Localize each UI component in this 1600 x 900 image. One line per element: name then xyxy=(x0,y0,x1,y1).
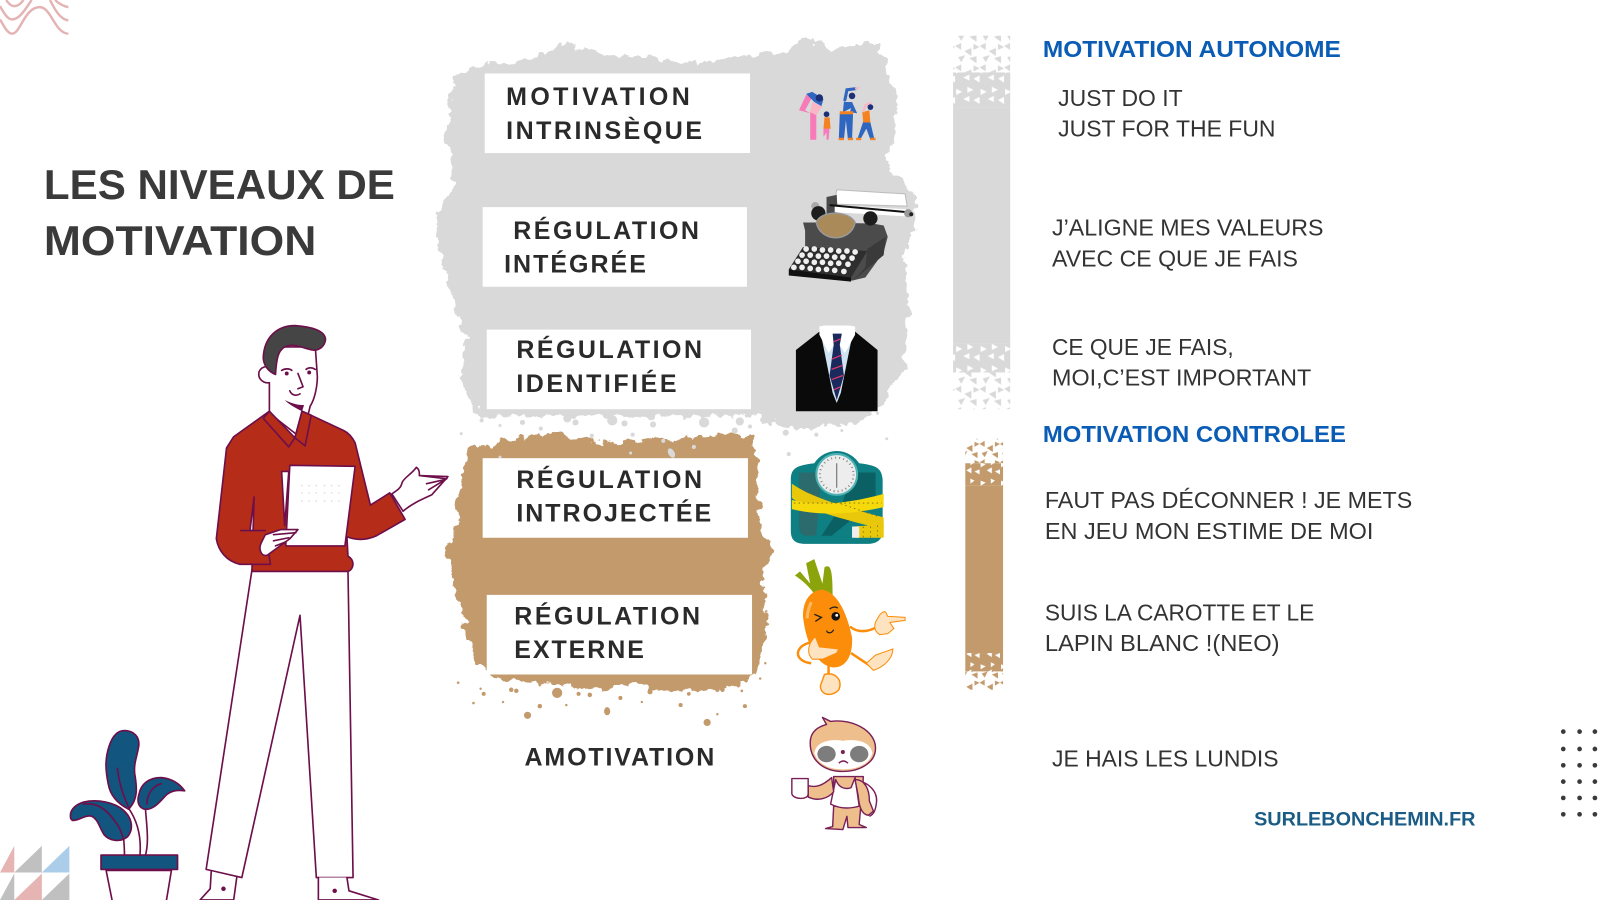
decoration: pink waves top-left xyxy=(0,0,68,34)
label: régulation introjectée: RÉGULATION xyxy=(516,465,702,494)
illustration: man presenting xyxy=(200,326,448,900)
text: just do it: JUST FOR THE FUN xyxy=(1058,116,1276,142)
boy xyxy=(857,121,874,140)
label: régulation externe: RÉGULATION xyxy=(514,601,700,630)
label: régulation intégrée xyxy=(483,207,747,287)
man xyxy=(839,113,853,140)
text: estime de moi: FAUT PAS DÉCONNER ! JE METS xyxy=(1045,487,1412,513)
left hand xyxy=(260,530,298,555)
panel: grey background blob xyxy=(433,39,918,429)
title: MOTIVATION xyxy=(44,217,316,264)
grey vertical strip xyxy=(953,36,1010,409)
sweater xyxy=(216,411,405,571)
label: régulation intégrée: RÉGULATION xyxy=(513,216,699,245)
collar xyxy=(263,411,311,447)
decoration: triangle tiles bottom-left xyxy=(0,846,69,900)
text: important: MOI,C’EST IMPORTANT xyxy=(1052,365,1311,391)
icon: sloth with coffee xyxy=(792,717,877,830)
heading: motivation autonome: MOTIVATION AUTONOME xyxy=(1043,36,1341,62)
sleeve fold xyxy=(250,497,254,531)
text: carotte xyxy=(1045,599,1314,656)
label: régulation identifiée: RÉGULATION xyxy=(516,335,702,364)
title: LES NIVEAUX DE xyxy=(44,161,395,208)
text: carotte: LAPIN BLANC !(NEO) xyxy=(1045,630,1280,656)
text: estime de moi xyxy=(1045,487,1412,544)
text: valeurs: J’ALIGNE MES VALEURS xyxy=(1052,215,1323,241)
right hand xyxy=(392,467,448,511)
tan vertical strip xyxy=(965,439,1003,690)
grey splatter xyxy=(460,412,888,456)
shoes xyxy=(200,871,379,900)
label: régulation introjectée: INTROJECTÉE xyxy=(516,498,711,527)
text: just do it: JUST DO IT xyxy=(1058,85,1183,111)
panel: tan background blob xyxy=(447,432,773,692)
icon: scale with tape measure xyxy=(791,451,884,544)
website: SURLEBONCHEMIN.FR xyxy=(1254,809,1476,831)
label: régulation introjectée xyxy=(483,458,748,538)
label: motivation intrinsèque: MOTIVATION xyxy=(506,83,690,111)
label: régulation externe xyxy=(487,595,752,674)
decoration: dot grid bottom-right xyxy=(1561,729,1597,817)
label: amotivation: AMOTIVATION xyxy=(524,743,714,771)
child xyxy=(823,128,830,140)
text: valeurs: AVEC CE QUE JE FAIS xyxy=(1052,245,1298,271)
text: lundis: JE HAIS LES LUNDIS xyxy=(1052,745,1279,771)
woman xyxy=(799,95,816,140)
splatter on tan xyxy=(498,439,696,463)
label: régulation externe: EXTERNE xyxy=(514,636,644,664)
text: important: CE QUE JE FAIS, xyxy=(1052,334,1234,360)
text: estime de moi: EN JEU MON ESTIME DE MOI xyxy=(1045,518,1373,544)
papers xyxy=(282,471,289,526)
hair xyxy=(263,326,326,374)
head and neck xyxy=(259,347,317,439)
icon: family stretching xyxy=(799,88,876,140)
label: régulation identifiée xyxy=(487,330,751,409)
trousers xyxy=(206,569,353,878)
icon: black suit xyxy=(796,326,878,411)
illustration: plant xyxy=(70,731,185,900)
text: important xyxy=(1052,334,1311,391)
text: carotte: SUIS LA CAROTTE ET LE xyxy=(1045,599,1314,625)
label: motivation intrinsèque: INTRINSÈQUE xyxy=(506,116,702,145)
text: just do it xyxy=(1058,85,1276,142)
icon: winking carrot xyxy=(795,559,905,694)
label: motivation intrinsèque xyxy=(485,73,750,153)
icon: typewriter xyxy=(789,190,913,282)
tan splatter xyxy=(457,662,767,726)
label: régulation identifiée: IDENTIFIÉE xyxy=(516,369,677,398)
label: régulation intégrée: INTÉGRÉE xyxy=(504,249,646,278)
face xyxy=(282,368,315,395)
heading: motivation controlee: MOTIVATION CONTROLEE xyxy=(1043,421,1346,447)
text: valeurs xyxy=(1052,215,1323,271)
